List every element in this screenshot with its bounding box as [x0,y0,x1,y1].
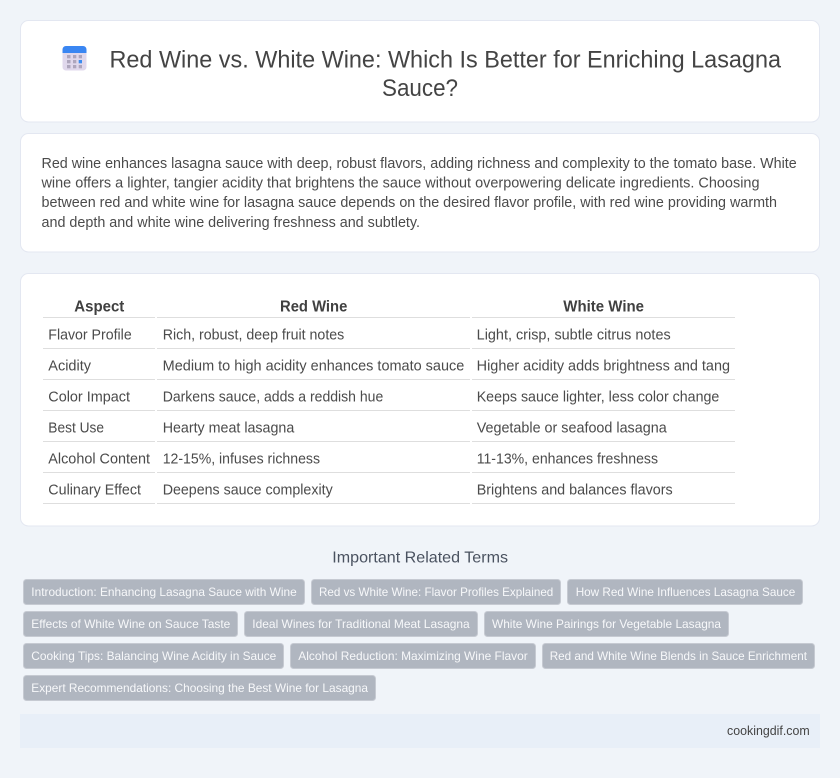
panel: introduction [20,134,820,252]
table row: color impact: Color Impact [48,389,130,405]
table row: flavor profile: Flavor Profile [48,327,132,343]
tag: Expert Recommendations: Choosing the Best Wine for Lasagna [31,681,368,695]
table row: best use: Vegetable or seafood lasagna [477,420,667,436]
table header row: White Wine [563,299,644,316]
table row: color impact: Darkens sauce, adds a reddish hue [163,389,383,405]
tag: Alcohol Reduction: Maximizing Wine Flavor [298,649,528,663]
table row: color impact: Keeps sauce lighter, less color change [477,389,719,405]
tag [24,644,284,668]
text block: introduction paragraph: Red wine enhances lasagna sauce with deep, robust flavors, adding richness and complexity to the tomato base. White [42,156,797,172]
tag [484,612,728,636]
title [110,46,782,102]
text block: introduction paragraph: between red and white wine for lasagna sauce depends on the desired flavor profile, with red wine providing warmth [42,195,777,211]
tag [24,612,238,636]
footer [20,714,820,748]
tag [290,644,536,668]
table header row: Aspect [74,299,125,316]
table row: color impact [43,389,735,411]
table row: best use [43,420,735,442]
table row: flavor profile: Rich, robust, deep fruit notes [163,327,344,343]
table row: best use: Hearty meat lasagna [163,420,294,436]
tag: How Red Wine Influences Lasagna Sauce [576,585,796,599]
panel: comparison table [20,274,820,526]
tag: Red and White Wine Blends in Sauce Enrichment [550,649,808,663]
table row: culinary effect [43,482,735,504]
table row: culinary effect: Deepens sauce complexity [163,482,333,498]
table row: flavor profile: Light, crisp, subtle citrus notes [477,327,671,343]
tag: Ideal Wines for Traditional Meat Lasagna [252,617,470,631]
tag [24,580,304,604]
table row: culinary effect: Brightens and balances flavors [477,482,673,498]
heading: important related terms: Important Related Terms [332,549,508,566]
table row: best use: Best Use [48,420,104,436]
table header row [43,299,735,318]
tag [244,612,478,636]
table row: acidity [43,358,735,380]
table row: alcohol content [43,451,735,473]
title: Sauce? [382,75,458,102]
title: Red Wine vs. White Wine: Which Is Better for Enriching Lasagna [110,46,782,74]
table row: alcohol content: 11-13%, enhances freshness [477,451,658,467]
text block: introduction paragraph [40,156,797,231]
icon: calendar [62,46,86,70]
tag: White Wine Pairings for Vegetable Lasagna [492,617,721,631]
text block: introduction paragraph: wine offers a lighter, tangier acidity that brightens the sauce without overpowering delicate ingredients. Choosing [40,176,760,192]
tag [542,644,814,668]
tag [568,580,802,604]
table header row: Red Wine [280,299,347,316]
table row: culinary effect: Culinary Effect [48,482,141,498]
table row: alcohol content: Alcohol Content [48,451,150,467]
footer source text: cookingdif.com [727,724,810,738]
table row: alcohol content: 12-15%, infuses richness [163,451,320,467]
table row: acidity: Acidity [48,358,92,374]
tag: Effects of White Wine on Sauce Taste [31,617,231,631]
table row: acidity: Medium to high acidity enhances tomato sauce [163,358,464,374]
panel: related term tags [24,580,814,700]
table row: flavor profile [43,327,735,349]
panel: title header [20,20,820,122]
tag: Cooking Tips: Balancing Wine Acidity in Sauce [31,649,277,663]
text block: introduction paragraph: and depth and white wine delivering freshness and subtlety. [42,215,420,231]
tag [312,580,560,604]
tag: Introduction: Enhancing Lasagna Sauce with Wine [31,585,297,599]
tag: Red vs White Wine: Flavor Profiles Explained [319,585,553,599]
tag [24,676,376,700]
table row: acidity: Higher acidity adds brightness and tang [477,358,730,374]
